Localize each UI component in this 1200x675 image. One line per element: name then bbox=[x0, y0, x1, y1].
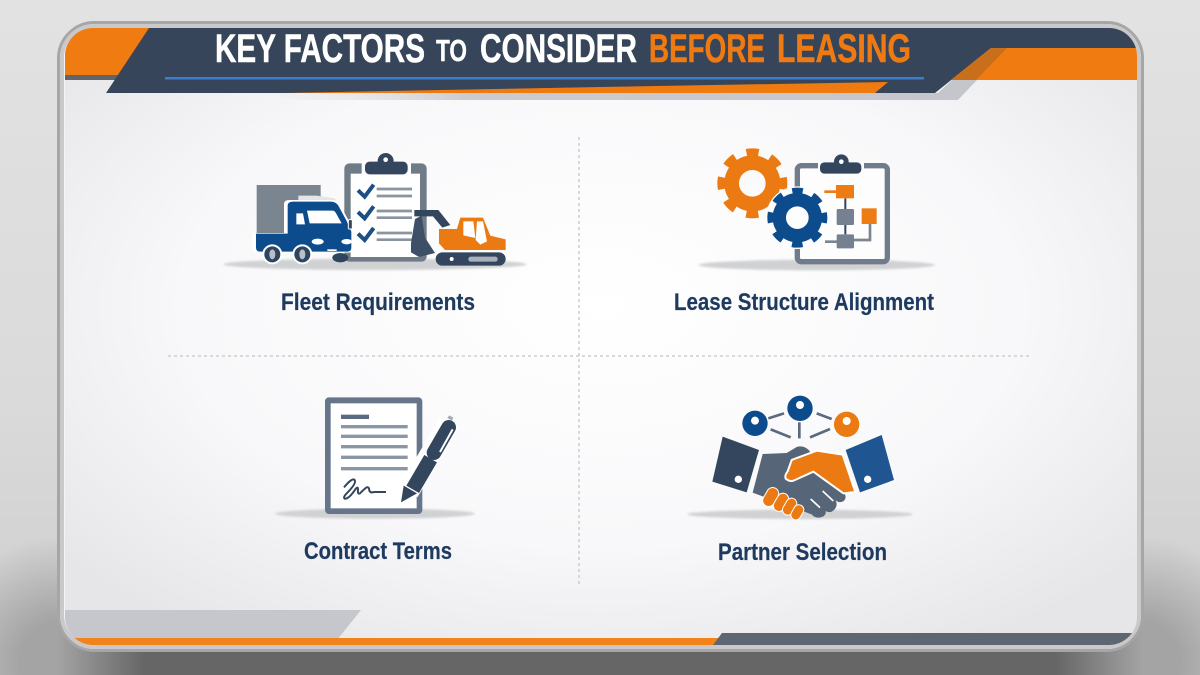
navy banner bbox=[106, 28, 1137, 93]
header banner bbox=[65, 28, 1137, 100]
clipboard outline bbox=[797, 154, 887, 262]
flowchart bbox=[824, 185, 877, 248]
icon: lease structure bbox=[698, 153, 935, 270]
clipboard bbox=[344, 153, 427, 262]
orange hand bbox=[785, 451, 855, 493]
card left shadow bbox=[0, 530, 60, 675]
label: fleet requirements: Fleet Requirements bbox=[281, 289, 475, 316]
footer orange strip bbox=[65, 638, 720, 645]
orange fingers bbox=[760, 485, 806, 522]
icon: contract bbox=[275, 397, 475, 519]
card right shadow bbox=[1140, 530, 1200, 675]
network bbox=[742, 396, 859, 438]
right cuff bbox=[846, 435, 894, 492]
left cuff bbox=[712, 437, 759, 492]
right orange band bbox=[951, 48, 1137, 80]
title: TO bbox=[436, 33, 467, 68]
title: LEASING bbox=[777, 27, 911, 71]
footer grey block bbox=[65, 610, 361, 640]
title: CONSIDER bbox=[480, 27, 637, 71]
title: KEY FACTORS bbox=[215, 27, 425, 71]
left orange corner bbox=[65, 28, 155, 75]
signature bbox=[344, 479, 386, 499]
card bottom shadow bbox=[57, 620, 1143, 675]
document bbox=[325, 397, 422, 514]
footer slate bar bbox=[713, 633, 1137, 645]
banner shadow bbox=[324, 80, 977, 100]
grey hand bbox=[753, 446, 846, 518]
orange gear bbox=[722, 153, 783, 214]
orange wedge bbox=[285, 82, 888, 93]
footer banner bbox=[65, 610, 1137, 645]
pen bbox=[401, 415, 453, 502]
dashed dividers bbox=[168, 137, 1032, 585]
grey finger gaps bbox=[811, 491, 833, 508]
truck bbox=[252, 185, 353, 263]
orange band fold bbox=[951, 48, 1007, 80]
title bbox=[215, 27, 911, 71]
label: contract terms: Contract Terms bbox=[304, 538, 452, 565]
left grey strip bbox=[65, 75, 118, 80]
excavator bbox=[411, 210, 506, 266]
title: BEFORE bbox=[649, 27, 765, 71]
icon: partnership bbox=[687, 396, 913, 522]
label: partner selection: Partner Selection bbox=[718, 539, 887, 566]
blue rule bbox=[165, 77, 924, 80]
icon: fleet requirements bbox=[223, 153, 527, 270]
blue gear bbox=[766, 186, 829, 249]
label: lease structure alignment: Lease Structure Alignment bbox=[674, 289, 934, 316]
